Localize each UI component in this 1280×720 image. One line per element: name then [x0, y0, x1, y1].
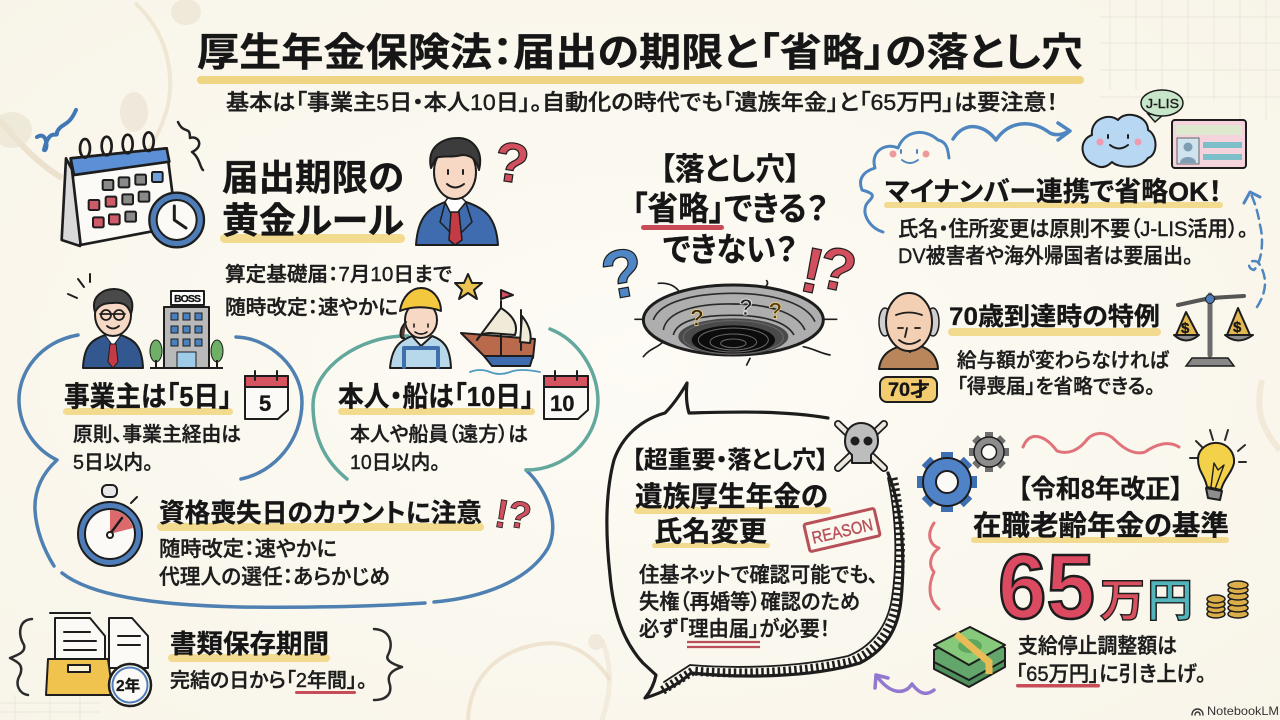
icon: pit — [635, 281, 837, 365]
icon: boss building: BOSS — [174, 293, 201, 305]
arrow head: dashed blue — [1244, 192, 1260, 203]
icon: calendar 5 — [245, 371, 288, 419]
heading: golden rule: 黄金ルール — [222, 200, 404, 241]
icon: calendar 10: 10 — [550, 391, 574, 416]
text: my number note: DV被害者や海外帰国者は要届出。 — [898, 245, 1193, 268]
heading: revision: 【令和8年改正】 — [1018, 474, 1183, 504]
icon: 70 age tag: 70才 — [888, 379, 930, 401]
text: survivor note: 住基ネットで確認可能でも、 — [639, 564, 878, 587]
text: revision note — [1016, 635, 1206, 688]
figure: 650,000 yen — [998, 536, 1193, 638]
text: self note: 本人や船員（遠方）は — [350, 423, 528, 446]
figure: 650,000 yen: 65 — [998, 536, 1095, 638]
icon: blue zigzag — [37, 110, 76, 150]
icon: elderly man — [879, 293, 939, 369]
text: employer note — [73, 423, 241, 474]
callout: J-LIS bubble — [1141, 90, 1183, 122]
heading: survivor pension: 【超重要・落とし穴】 — [632, 447, 828, 474]
icon: calendar with clock — [62, 132, 204, 247]
arrow: dashed blue up — [1249, 192, 1265, 307]
heading: pitfall: 【落とし穴】 — [660, 152, 800, 187]
heading: survivor pension: 氏名変更 — [654, 516, 767, 547]
icon: gears — [917, 432, 1009, 512]
icon: ship — [461, 290, 540, 374]
panel: golden rule — [37, 110, 533, 319]
text: deadlines: 随時改定：速やかに — [225, 296, 398, 319]
heading: pitfall: 「省略」できる？ — [632, 190, 828, 227]
heading: survivor pension — [632, 447, 831, 548]
brace left and right — [10, 619, 402, 700]
icon: happy cloud — [1083, 115, 1156, 167]
heading: count caution: 資格喪失日のカウントに注意 — [159, 498, 482, 528]
icon: red question mark: ? — [490, 129, 533, 196]
text: survivor note: 必ず「理由届」が必要！ — [639, 618, 830, 641]
panel: my number link — [861, 90, 1265, 307]
icon: money stack — [934, 627, 1005, 687]
icon: exclamation and question: ! — [491, 492, 512, 537]
icon: man in suit — [416, 138, 498, 245]
panel: self and seafarer 10 days — [338, 274, 588, 474]
panel: pitfall — [595, 152, 862, 365]
arrow: blue wave — [953, 123, 1070, 140]
logo: NotebookLM: NotebookLM — [1207, 704, 1279, 718]
heading: golden rule — [220, 157, 405, 243]
chart: speech bubble outline — [607, 383, 903, 698]
panel: employer 5 days — [63, 274, 288, 474]
icon: light bulb — [1190, 430, 1246, 500]
icon: boss building — [150, 291, 223, 368]
heading: pitfall — [632, 152, 828, 268]
figure: 650,000 yen: 万 — [1100, 575, 1145, 626]
icon: exclamation and question — [491, 492, 535, 539]
panel: 2026 revision — [917, 430, 1248, 688]
heading: survivor pension: 遺族厚生年金の — [635, 481, 828, 512]
icon: 70 age tag — [880, 377, 937, 402]
heading: revision: 在職老齢年金の基準 — [973, 510, 1229, 541]
text: self note — [350, 423, 528, 474]
icon: calendar 10 — [544, 371, 588, 419]
icon: pit: ? — [690, 305, 704, 331]
subtitle: 基本は「事業主5日・本人10日」。自動化の時代でも「遺族年金」と「65万円」は要注意！ — [226, 90, 1058, 115]
decoration: red cloud line — [1023, 433, 1179, 453]
text: my number note — [898, 218, 1248, 268]
decoration: red squiggle — [930, 523, 939, 609]
icon: balance scale — [1174, 294, 1253, 366]
text: age 70 note — [957, 349, 1170, 398]
arrow: purple curl — [875, 675, 934, 693]
icon: pit: ? — [768, 297, 782, 323]
text: deadlines: 算定基礎届：7月10日まで — [225, 263, 452, 286]
icon: document box — [46, 613, 151, 706]
panel: count caution — [78, 485, 535, 589]
icon: star — [455, 274, 482, 299]
text: survivor note — [639, 564, 878, 647]
icon: yellow spark — [178, 122, 203, 170]
icon: balance scale: $ — [1233, 319, 1242, 336]
icon: businessman with glasses — [68, 274, 143, 368]
heading: age 70: 70歳到達時の特例 — [949, 303, 1160, 331]
icon: my number card — [1172, 120, 1246, 168]
icon: skull and crossbones — [838, 423, 884, 468]
title text: 厚生年金保険法：届出の期限と「省略」の落とし穴 — [197, 32, 1083, 75]
text: age 70 note: 「得喪届」を省略できる。 — [957, 375, 1155, 398]
panel: document retention — [10, 613, 402, 706]
text: my number note: 氏名・住所変更は原則不要（J-LIS活用）。 — [898, 218, 1248, 241]
text: employer note: 5日以内。 — [73, 451, 153, 474]
text: revision note: 「65万円」に引き上げ。 — [1016, 663, 1206, 686]
text: deadlines — [225, 263, 452, 319]
chart: cloud outline teal — [313, 329, 598, 479]
heading: revision — [971, 474, 1229, 543]
title underline — [197, 76, 1084, 84]
icon: document box: 2年 — [116, 676, 140, 695]
icon: red exclamation question: ! — [795, 233, 830, 308]
heading: golden rule: 届出期限の — [222, 157, 404, 198]
icon: coins — [1207, 581, 1248, 618]
figure: 650,000 yen: 円 — [1147, 575, 1193, 626]
icon: calendar 5: 5 — [259, 391, 271, 416]
chart: cloud outline with face — [861, 132, 949, 232]
text: count caution notes: 代理人の選任：あらかじめ — [159, 566, 390, 589]
title — [197, 32, 1084, 84]
text: count caution notes — [159, 538, 390, 589]
icon: pit: ? — [739, 294, 753, 320]
icon: exclamation and question: ? — [504, 493, 535, 539]
chart: cloud outline blue — [19, 335, 553, 607]
callout: J-LIS bubble: J-LIS — [1146, 96, 1179, 111]
icon: red exclamation question: ? — [812, 233, 862, 306]
icon: blue question: ? — [595, 233, 650, 315]
text: survivor note: 失権（再婚等）確認のため — [639, 591, 860, 614]
heading: pitfall: できない？ — [663, 231, 797, 268]
panel: survivor pension speech bubble — [607, 383, 903, 698]
icon: reason stamp: REASON — [810, 515, 875, 548]
icon: balance scale: $ — [1181, 320, 1190, 337]
icon: worker with helmet — [390, 288, 451, 368]
panel: age 70 exception — [879, 293, 1253, 402]
text: age 70 note: 給与額が変わらなければ — [957, 349, 1170, 372]
text: employer note: 原則、事業主経由は — [73, 423, 241, 446]
text: self note: 10日以内。 — [350, 451, 440, 474]
heading: self and seafarer 10 days: 本人・船は「10日」 — [338, 381, 534, 412]
heading: my number: マイナンバー連携で省略OK！ — [885, 177, 1222, 207]
heading: document retention: 書類保存期間 — [170, 629, 329, 659]
heading: employer 5 days: 事業主は「5日」 — [64, 381, 232, 412]
text: retention note: 完結の日から「2年間」。 — [170, 669, 367, 692]
icon: stopwatch — [78, 485, 142, 566]
text: revision note: 支給停止調整額は — [1018, 635, 1177, 658]
text: count caution notes: 随時改定：速やかに — [159, 538, 337, 561]
